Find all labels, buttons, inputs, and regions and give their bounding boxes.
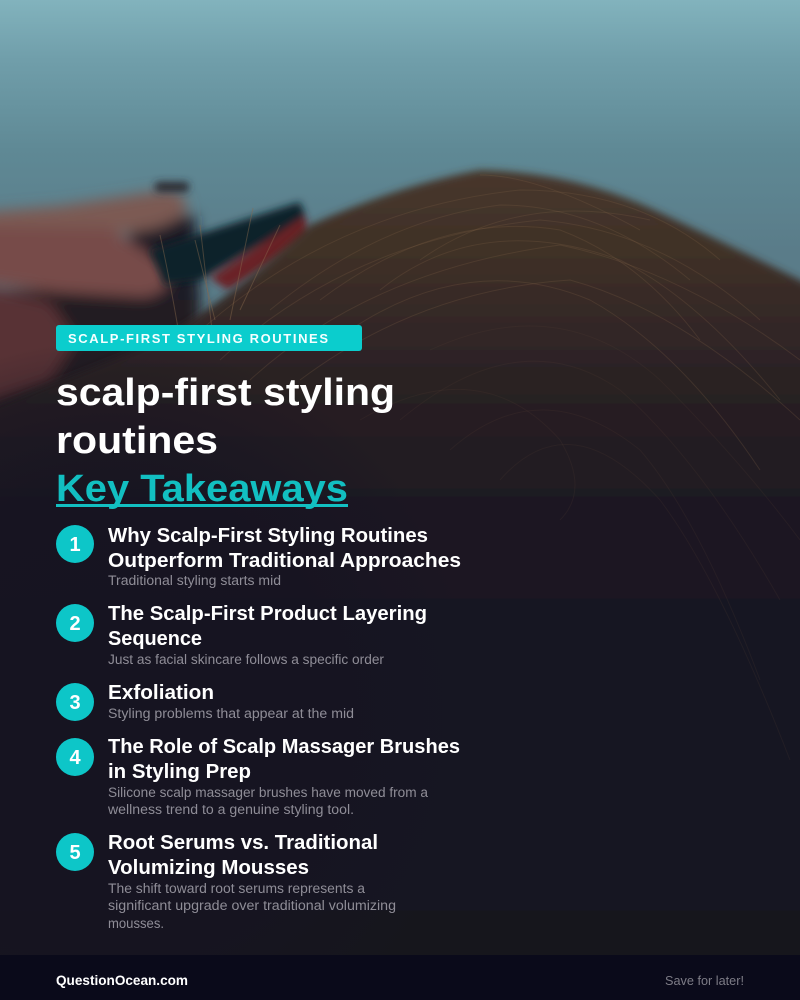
takeaway 3: Exfoliation	[108, 682, 214, 704]
takeaway 4: wellness trend to a genuine styling tool.	[107, 802, 354, 817]
takeaway 5	[56, 832, 396, 931]
takeaway 1: Why Scalp-First Styling Routines	[108, 525, 428, 547]
takeaway 4: The Role of Scalp Massager Brushes	[108, 736, 460, 758]
takeaway 3: 3	[69, 692, 81, 714]
title: scalp-first styling	[56, 372, 395, 414]
takeaway 5: 5	[69, 842, 81, 864]
takeaway 2: 2	[69, 613, 81, 635]
takeaway 3: Styling problems that appear at the mid	[108, 706, 354, 721]
category badge: SCALP-FIRST STYLING ROUTINES	[68, 331, 328, 346]
takeaway 5: mousses.	[108, 916, 164, 931]
takeaway 2: Sequence	[108, 628, 202, 650]
takeaway 5: significant upgrade over traditional volumizing	[108, 898, 396, 913]
takeaway 5: Volumizing Mousses	[108, 857, 309, 879]
takeaway 1: Traditional styling starts mid	[108, 573, 281, 588]
takeaway 5: The shift toward root serums represents a	[108, 881, 366, 896]
takeaway 4: Silicone scalp massager brushes have moved from a	[108, 785, 428, 800]
takeaway 2: Just as facial skincare follows a specific order	[108, 652, 384, 667]
takeaway 3	[56, 682, 354, 721]
takeaway 1: Outperform Traditional Approaches	[108, 550, 461, 572]
takeaway 1: 1	[69, 534, 81, 556]
dark lower-left	[0, 340, 490, 955]
takeaway 4	[56, 736, 460, 817]
category badge	[56, 325, 362, 351]
footer save note: Save for later!	[665, 973, 744, 988]
title	[56, 372, 395, 462]
hair strands	[190, 175, 800, 470]
blurred hand	[0, 190, 200, 500]
stray hairs over comb	[160, 208, 280, 340]
subtitle: Key Takeaways: Key Takeaways	[56, 468, 348, 510]
footer brand: QuestionOcean.com	[56, 972, 188, 988]
title: routines	[56, 420, 218, 462]
takeaway 5: Root Serums vs. Traditional	[108, 832, 378, 854]
footer bar	[0, 955, 800, 1000]
takeaway 1	[56, 525, 461, 588]
blurred comb	[150, 182, 310, 290]
takeaway 2	[56, 603, 427, 667]
takeaway 4: 4	[69, 747, 81, 769]
takeaway 4: in Styling Prep	[108, 761, 251, 783]
takeaway 2: The Scalp-First Product Layering	[108, 603, 427, 625]
